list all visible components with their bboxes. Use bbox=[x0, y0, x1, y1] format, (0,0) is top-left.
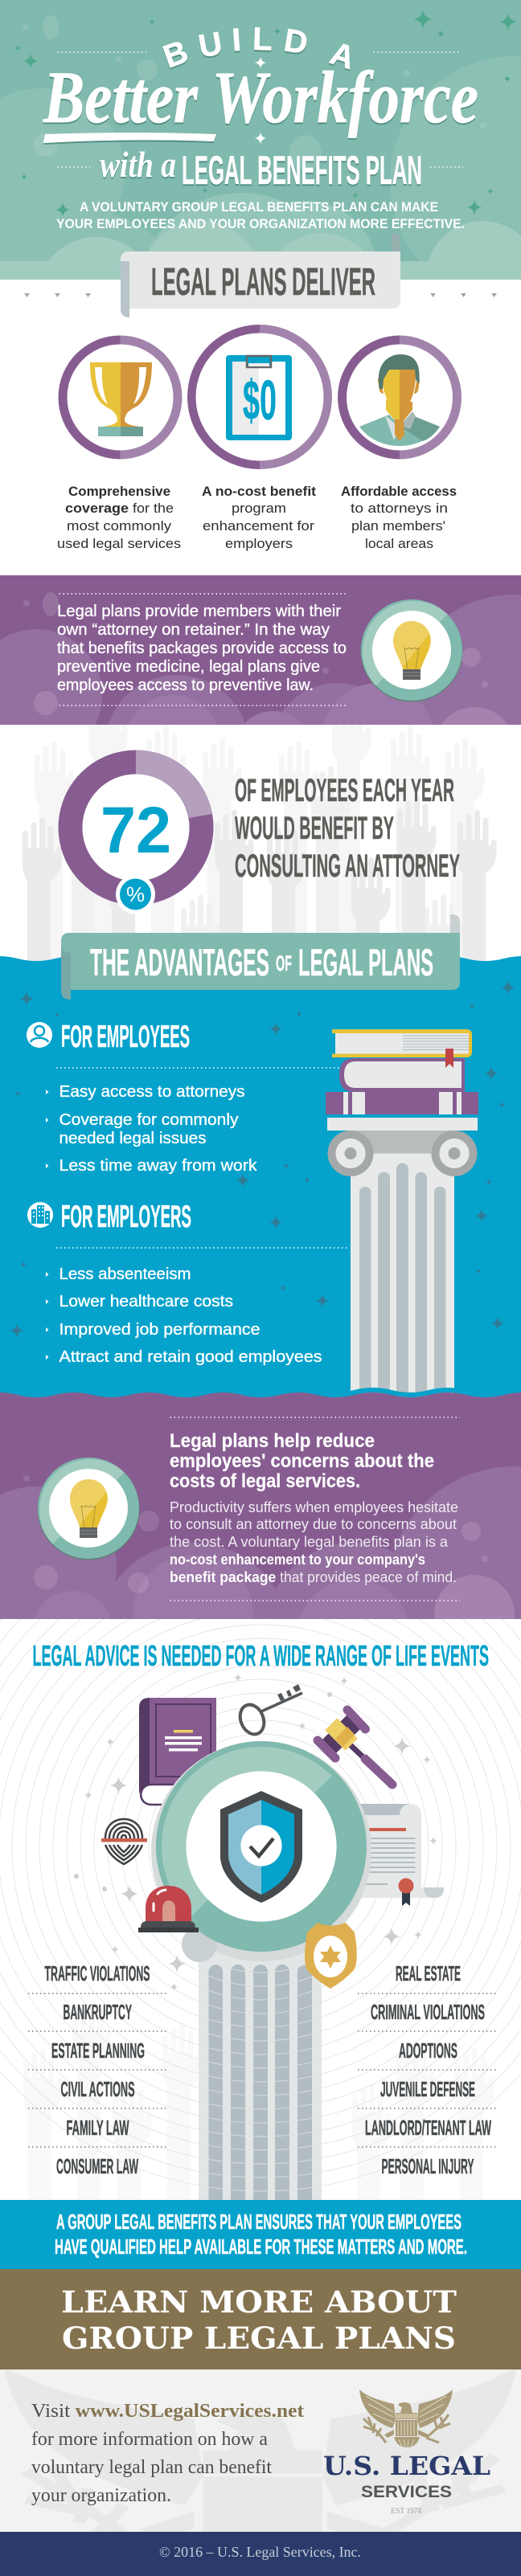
heading: reduce concerns: costs of legal services. bbox=[170, 1470, 360, 1492]
section: for employers: FOR EMPLOYERS bbox=[61, 1200, 191, 1234]
column behind list bbox=[199, 1928, 322, 2202]
title: build a: L bbox=[252, 22, 273, 57]
icon: shield in ring bbox=[151, 1741, 371, 1962]
logo: U.S. Legal Services: EST 1974 bbox=[391, 2506, 421, 2516]
title: build a: U bbox=[196, 26, 225, 64]
text: visit website bbox=[31, 2401, 304, 2506]
text: comprehensive coverage: coverage for the bbox=[65, 501, 174, 516]
footer: copyright: © 2016 – U.S. Legal Services, Inc. bbox=[159, 2544, 361, 2560]
banner: the advantages of legal plans: THE ADVANTAGES bbox=[90, 941, 269, 983]
text: affordable access: Affordable access bbox=[341, 484, 457, 499]
text: visit website: Visit www.USLegalServices.net bbox=[31, 2401, 304, 2422]
icon: fingerprint bbox=[101, 1819, 147, 1864]
section: for employees bbox=[27, 1020, 341, 1175]
panel: reduce concerns about costs bbox=[0, 1388, 521, 1619]
text: productivity paragraph: Productivity suffers when employees hesitate bbox=[170, 1499, 458, 1515]
text: productivity paragraph: the cost. A voluntary legal benefits plan is a bbox=[170, 1534, 449, 1550]
list: employee advantages: Less time away from work bbox=[59, 1157, 258, 1175]
logo: U.S. Legal Services bbox=[323, 2390, 490, 2516]
list: life events left: CONSUMER LAW bbox=[56, 2154, 138, 2178]
icon: column bbox=[327, 1118, 478, 1398]
text: visit website: voluntary legal plan can benefit bbox=[31, 2457, 272, 2478]
stat: 72 percent donut bbox=[71, 750, 212, 914]
text: productivity paragraph: to consult an attorney due to concerns about bbox=[170, 1516, 457, 1532]
list: employer advantages: Less absenteeism bbox=[59, 1266, 191, 1283]
panel: learn more call to action bbox=[0, 2269, 521, 2370]
section: for employers bbox=[27, 1200, 348, 1366]
text: productivity paragraph bbox=[170, 1499, 458, 1585]
title: build a: A bbox=[326, 35, 359, 76]
illustration: books on column bbox=[326, 1029, 478, 1398]
text: no-cost benefit bbox=[202, 484, 316, 551]
title: with a bbox=[100, 144, 176, 185]
text: productivity paragraph: no-cost enhancement to your company's bbox=[170, 1552, 425, 1568]
icon: trophy bbox=[90, 362, 152, 436]
list: employee advantages: needed legal issues bbox=[59, 1130, 206, 1147]
icon: law book bbox=[139, 1698, 216, 1805]
title: build a: I bbox=[231, 22, 242, 58]
text: affordable access: local areas bbox=[365, 536, 433, 551]
title: build a: B bbox=[158, 34, 193, 75]
list: life events right: ADOPTIONS bbox=[399, 2038, 457, 2063]
text: retainer paragraph bbox=[57, 603, 347, 694]
logo: U.S. Legal Services: SERVICES bbox=[361, 2482, 452, 2501]
panel: affordable access bbox=[338, 336, 462, 551]
icon: police badge bbox=[305, 1923, 357, 1989]
list: employee advantages: Coverage for commonly bbox=[59, 1111, 238, 1129]
list: employer advantages: Attract and retain good employees bbox=[59, 1348, 322, 1366]
heading: reduce concerns bbox=[170, 1430, 434, 1492]
text: visit website: your organization. bbox=[31, 2485, 171, 2506]
text: no-cost benefit: A no-cost benefit bbox=[202, 484, 316, 499]
list: life events left: FAMILY LAW bbox=[66, 2116, 129, 2140]
text: affordable access: to attorneys in bbox=[351, 501, 448, 516]
panel: advantages background bbox=[0, 956, 521, 1402]
text: visit website: for more information on how a bbox=[31, 2429, 268, 2450]
section: for employees: FOR EMPLOYEES bbox=[61, 1020, 190, 1054]
stat: 72 percent donut: 72 bbox=[101, 794, 171, 867]
icon: light bulb bbox=[360, 599, 463, 702]
text: no-cost benefit: program bbox=[232, 501, 286, 516]
icon: clipboard: $0 bbox=[243, 369, 277, 431]
list: employer advantages: Lower healthcare costs bbox=[59, 1293, 233, 1310]
list: employee advantages bbox=[46, 1083, 258, 1175]
banner: the advantages of legal plans: OF bbox=[276, 951, 292, 975]
section: life events background bbox=[0, 1619, 521, 2200]
banner: legal plans deliver bbox=[24, 233, 497, 317]
text: stat description bbox=[235, 773, 460, 884]
icon: clipboard ring bbox=[187, 325, 332, 469]
stat: 72 percent donut: % bbox=[126, 882, 145, 906]
heading: reduce concerns: Legal plans help reduce bbox=[170, 1430, 375, 1452]
footer: copyright bbox=[0, 2532, 521, 2576]
title: build a: D bbox=[281, 22, 310, 61]
panel: qualified help statement bbox=[0, 2200, 521, 2269]
list: life events left bbox=[28, 1961, 166, 2178]
panel: attorney on retainer bbox=[0, 575, 521, 725]
text: productivity paragraph: benefit package that provides peace of mind. bbox=[170, 1569, 457, 1585]
list: employee advantages: Easy access to attorneys bbox=[59, 1083, 244, 1101]
text: retainer paragraph: preventive medicine, legal plans give bbox=[57, 658, 320, 676]
icon: stack of books bbox=[326, 1029, 478, 1114]
text: affordable access: plan members' bbox=[351, 518, 445, 534]
text: no-cost benefit: employers bbox=[225, 536, 293, 551]
icon: office buildings bbox=[27, 1202, 53, 1228]
heading: reduce concerns: employees' concerns about the bbox=[170, 1450, 434, 1472]
icon: employee bbox=[27, 1022, 52, 1048]
icon: certificate bbox=[357, 1804, 444, 1906]
text: comprehensive coverage: Comprehensive bbox=[68, 484, 170, 499]
list: life events left: BANKRUPTCY bbox=[63, 2000, 132, 2024]
panel: learn more call to action: GROUP LEGAL PLANS bbox=[62, 2320, 456, 2356]
text: retainer paragraph: that benefits packages provide access to bbox=[57, 640, 347, 657]
text: comprehensive coverage bbox=[57, 484, 181, 551]
icon: gavel bbox=[318, 1710, 392, 1785]
subtitle: A VOLUNTARY GROUP LEGAL BENEFITS PLAN CAN MAKE bbox=[80, 199, 438, 215]
text: no-cost benefit: enhancement for bbox=[203, 518, 314, 534]
text: retainer paragraph: employees access to preventive law. bbox=[57, 677, 314, 694]
icon: attorney ring bbox=[338, 336, 462, 460]
icon: key bbox=[236, 1684, 302, 1738]
icon: siren bbox=[138, 1886, 199, 1932]
header panel bbox=[0, 0, 521, 280]
list: employer advantages: Improved job performance bbox=[59, 1321, 260, 1339]
panel: contact details bbox=[0, 2370, 521, 2532]
icon: trophy ring bbox=[58, 336, 182, 460]
subtitle bbox=[56, 199, 465, 231]
icon: attorney bbox=[359, 354, 440, 446]
panel: no-cost benefit bbox=[187, 325, 332, 551]
text: comprehensive coverage: most commonly bbox=[67, 518, 172, 534]
list: life events right bbox=[358, 1961, 496, 2178]
text: comprehensive coverage: used legal services bbox=[57, 536, 181, 551]
logo: U.S. Legal Services: U.S. LEGAL bbox=[323, 2451, 490, 2481]
panel: learn more call to action: LEARN MORE ABOUT bbox=[61, 2284, 457, 2320]
icon: light bulb bbox=[37, 1458, 140, 1560]
text: retainer paragraph: own “attorney on retainer.” In the way bbox=[57, 621, 330, 639]
list: employer advantages bbox=[46, 1266, 322, 1366]
text: affordable access bbox=[341, 484, 457, 551]
title: build a bbox=[158, 22, 359, 76]
list: life events left: CIVIL ACTIONS bbox=[61, 2077, 135, 2101]
list: life events left: TRAFFIC VIOLATIONS bbox=[45, 1961, 150, 1985]
icon: clipboard bbox=[226, 355, 292, 440]
banner: the advantages of legal plans bbox=[61, 914, 460, 1000]
panel: comprehensive coverage bbox=[57, 336, 182, 551]
list: life events left: ESTATE PLANNING bbox=[51, 2038, 145, 2063]
text: retainer paragraph: Legal plans provide members with their bbox=[57, 603, 341, 620]
background: raised hands bbox=[23, 725, 497, 961]
subtitle: YOUR EMPLOYEES AND YOUR ORGANIZATION MORE EFFECTIVE. bbox=[56, 216, 465, 231]
title bbox=[43, 22, 478, 193]
